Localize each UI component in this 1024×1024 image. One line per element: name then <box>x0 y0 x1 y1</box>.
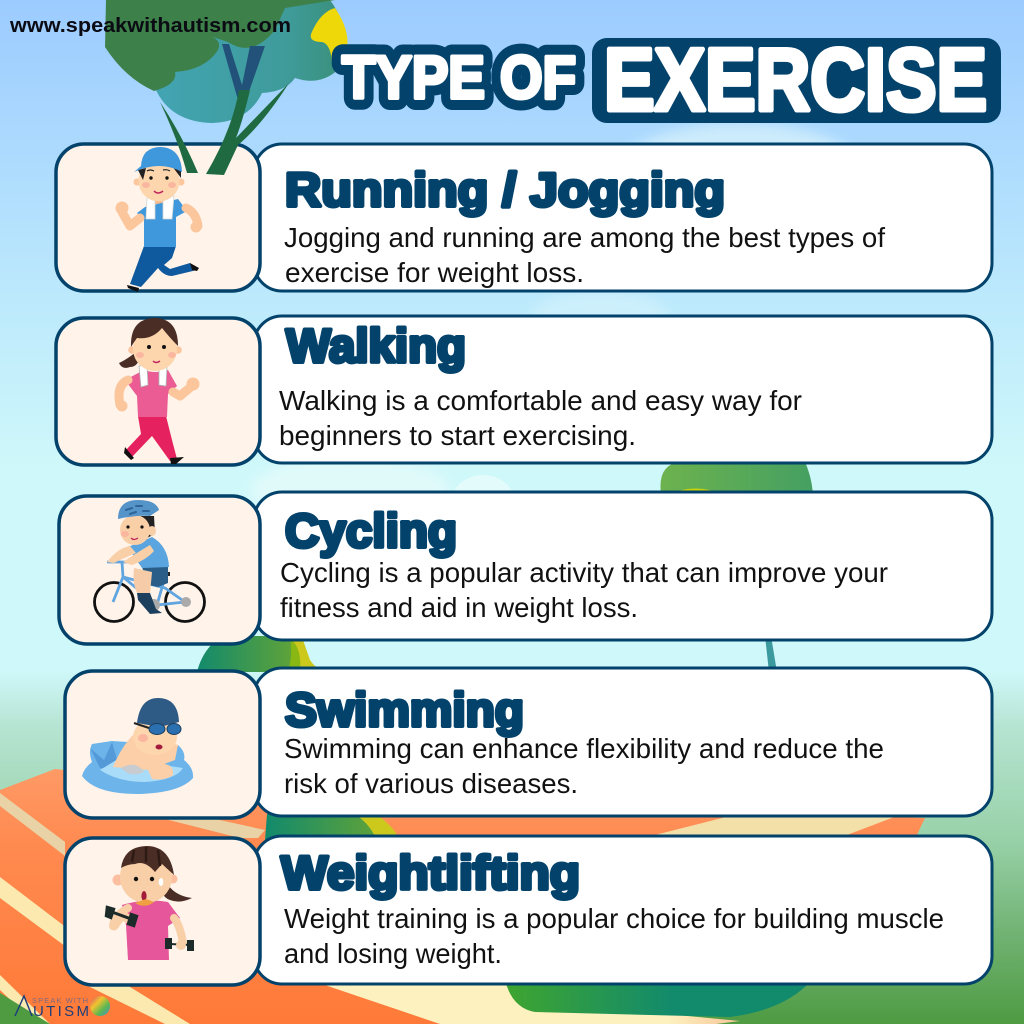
icon: runner <box>116 147 202 292</box>
description: swimming <box>284 733 884 799</box>
description: walking: Walking is a comfortable and easy way for <box>279 385 802 416</box>
description: swimming: risk of various diseases. <box>284 768 578 799</box>
title: type of: TYPE OF <box>342 44 576 111</box>
description: running <box>284 222 885 288</box>
heading: weightlifting: Weightlifting <box>281 846 580 899</box>
website url: www.speakwithautism.com <box>9 14 291 37</box>
card: walking <box>254 316 992 463</box>
heading: swimming: Swimming <box>285 683 524 736</box>
description: weightlifting <box>284 903 944 969</box>
heading: walking: Walking <box>286 319 466 372</box>
description: running: exercise for weight loss. <box>285 257 584 288</box>
icon: walker <box>116 318 200 464</box>
card: weightlifting <box>254 836 992 984</box>
card: cycling <box>254 492 992 640</box>
heading: cycling: Cycling <box>285 504 457 557</box>
panel: runner <box>56 144 260 291</box>
description: swimming: Swimming can enhance flexibility and reduce the <box>284 733 884 764</box>
title <box>342 30 1001 129</box>
card: running / jogging <box>254 144 992 291</box>
card: swimming <box>254 668 992 816</box>
logo: speak with autism: SPEAK WITH <box>32 996 88 1005</box>
panel: weightlifter <box>65 838 260 985</box>
description: cycling: Cycling is a popular activity that can improve your <box>280 557 888 588</box>
panel: swimmer <box>65 671 260 818</box>
description: walking: beginners to start exercising. <box>279 420 636 451</box>
description: running: Jogging and running are among the best types of <box>284 222 885 253</box>
description: weightlifting: and losing weight. <box>284 938 502 969</box>
icon: weightlifter <box>106 846 193 960</box>
running track <box>0 769 925 1024</box>
background trees <box>197 462 813 672</box>
panel: walker <box>56 318 260 465</box>
icon: cyclist <box>94 500 204 622</box>
heading: running / jogging: Running / Jogging <box>285 163 725 216</box>
icon: swimmer <box>82 698 193 794</box>
description: walking <box>279 385 802 451</box>
logo: speak with autism <box>15 996 110 1020</box>
logo: speak with autism: UTISM <box>33 1003 89 1020</box>
title: type of: TYPE OF <box>342 44 576 111</box>
description: weightlifting: Weight training is a popular choice for building muscle <box>284 903 944 934</box>
description: cycling: fitness and aid in weight loss. <box>280 592 638 623</box>
panel: cyclist <box>59 496 260 644</box>
tree at top <box>105 0 348 175</box>
description: cycling <box>280 557 888 623</box>
clouds <box>250 123 865 535</box>
